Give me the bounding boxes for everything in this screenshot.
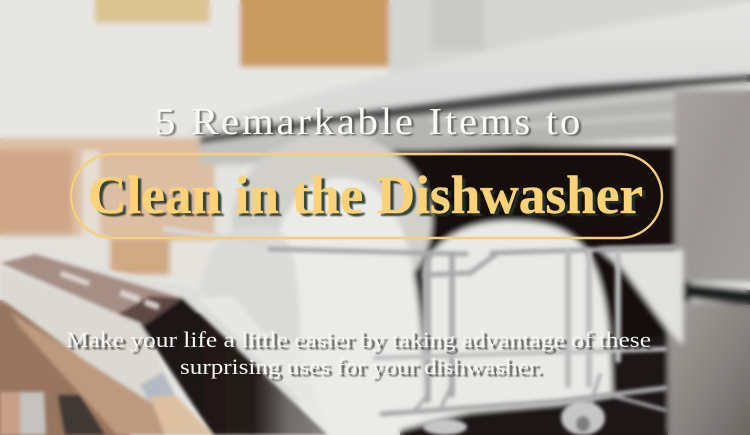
door top panel [0, 253, 215, 340]
door buttons [60, 271, 159, 309]
door control strip [0, 254, 183, 327]
plate stack right [425, 221, 612, 435]
subtitle text: surprising uses for your dishwasher. [183, 356, 545, 382]
plate rim back [232, 134, 432, 310]
kicker heading: 5 Remarkable Items to [158, 102, 586, 144]
subtitle text: surprising uses for your dishwasher. [180, 354, 542, 379]
tall white plate right [600, 250, 683, 345]
main heading: Clean in the Dishwasher [92, 168, 646, 228]
door white rim [197, 296, 328, 435]
subtitle text [66, 327, 654, 382]
subtitle text: Make your life a little easier by taking advantage of these [69, 330, 654, 354]
right steel panel upper [675, 90, 750, 282]
pill outline [71, 154, 662, 238]
right steel panel lower [668, 300, 750, 435]
main heading: Clean in the Dishwasher [88, 165, 643, 225]
dark slit [685, 283, 750, 306]
plate stack left [256, 178, 425, 435]
wooden cabinet [0, 138, 215, 435]
rack rails backdrop [375, 86, 675, 150]
lower interior dark [400, 335, 668, 435]
dark strip under counter [200, 72, 750, 146]
subtitle text: Make your life a little easier by taking advantage of these [66, 327, 651, 352]
wooden shelf: small [95, 0, 210, 23]
lower left dark [58, 395, 105, 435]
wall area [0, 0, 750, 145]
interior dark [360, 145, 690, 435]
door dark side [142, 298, 328, 435]
door white front [0, 268, 175, 405]
wooden shelf: large [240, 0, 389, 67]
pale stripe below cabinet [0, 236, 110, 266]
door wooden front [10, 312, 213, 435]
kicker heading: 5 Remarkable Items to [155, 101, 583, 143]
counter band [190, 2, 750, 136]
rack wheels [423, 401, 605, 435]
dish rack [165, 229, 675, 414]
